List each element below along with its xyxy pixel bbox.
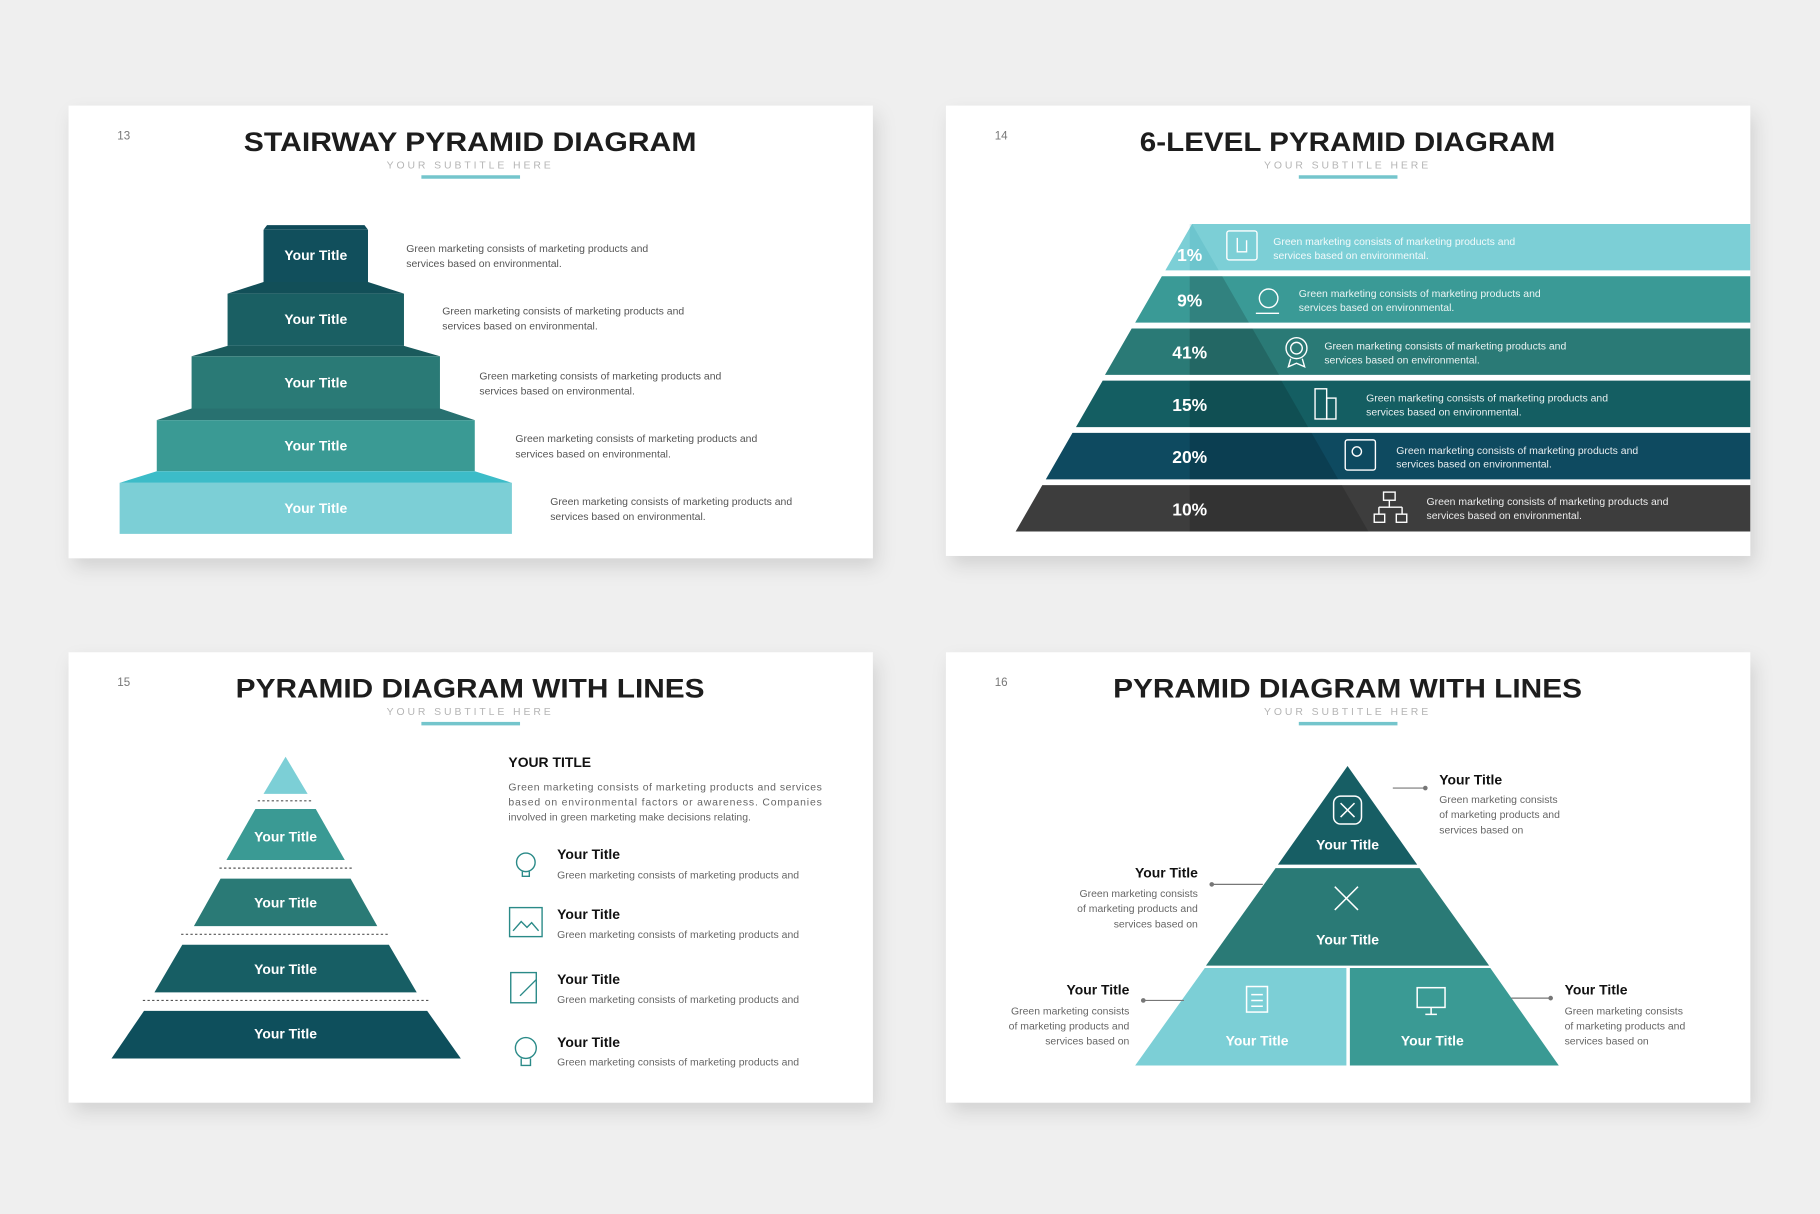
title: PYRAMID DIAGRAM WITH LINES bbox=[1113, 674, 1582, 704]
panel: pyramid diagram with lines (16): services based on bbox=[1045, 1037, 1130, 1048]
panel: pyramid diagram with lines (16): of marketing products and bbox=[1077, 904, 1198, 915]
stair pyramid chart: Your Title bbox=[284, 375, 347, 391]
panel: pyramid diagram with lines (15) bbox=[69, 652, 873, 1103]
step descriptions: services based on environmental. bbox=[550, 512, 706, 523]
step descriptions: Green marketing consists of marketing products and bbox=[406, 244, 648, 255]
level bars chart: 9% bbox=[1177, 290, 1202, 310]
triangle pyramid: Your Title bbox=[1316, 837, 1379, 853]
panel: pyramid diagram with lines (16): services based on bbox=[1114, 919, 1198, 930]
panel: stairway pyramid bbox=[69, 106, 873, 558]
panel: pyramid diagram with lines (16) bbox=[946, 652, 1750, 1103]
step descriptions bbox=[406, 244, 792, 523]
panel: pyramid diagram with lines (16): of marketing products and bbox=[1009, 1021, 1130, 1032]
level bars chart bbox=[1016, 224, 1750, 532]
slide number 16: 16 bbox=[995, 676, 1008, 689]
panel: pyramid diagram with lines (16): services based on bbox=[1565, 1037, 1649, 1048]
step descriptions: Green marketing consists of marketing products and bbox=[515, 434, 758, 445]
slide number 13: 13 bbox=[117, 129, 130, 142]
layered triangle pyramid: Your Title bbox=[254, 895, 317, 911]
panel: pyramid diagram with lines (15): based on environmental factors or awareness. Companies bbox=[508, 797, 822, 808]
level bars chart: services based on environmental. bbox=[1273, 251, 1429, 262]
panel: pyramid diagram with lines (15): involved in green marketing make decisions relating. bbox=[508, 813, 751, 824]
level bars chart: Green marketing consists of marketing products and bbox=[1366, 394, 1608, 405]
panel: 6-level pyramid bbox=[946, 106, 1750, 556]
panel: pyramid diagram with lines (15): Green marketing consists of marketing products and bbox=[557, 871, 799, 882]
level bars chart: 1% bbox=[1177, 245, 1202, 265]
slide number 14: 14 bbox=[995, 129, 1008, 142]
title: PYRAMID DIAGRAM WITH LINES bbox=[236, 674, 705, 704]
stair pyramid chart bbox=[120, 225, 512, 534]
triangle pyramid: Your Title bbox=[1316, 932, 1379, 948]
subtitle: YOUR SUBTITLE HERE bbox=[387, 707, 554, 718]
panel: pyramid diagram with lines (16): services based on bbox=[1439, 825, 1524, 836]
panel: pyramid diagram with lines (16): of marketing products and bbox=[1565, 1021, 1685, 1032]
panel: pyramid diagram with lines (15): Your Title bbox=[557, 846, 620, 862]
step descriptions: Green marketing consists of marketing products and bbox=[550, 497, 792, 508]
label bottom right: Your Title bbox=[1565, 982, 1628, 998]
level bars chart: 10% bbox=[1172, 499, 1207, 519]
label top right: Your Title bbox=[1439, 772, 1502, 788]
panel: pyramid diagram with lines (15): Green marketing consists of marketing products and services bbox=[508, 782, 822, 793]
panel: pyramid diagram with lines (15): Green marketing consists of marketing products and bbox=[557, 930, 799, 941]
level bars chart: services based on environmental. bbox=[1299, 303, 1454, 314]
stair pyramid chart: Your Title bbox=[284, 247, 347, 263]
layered triangle pyramid: Your Title bbox=[254, 1026, 317, 1042]
label bottom left: Your Title bbox=[1067, 982, 1130, 998]
level bars chart: services based on environmental. bbox=[1324, 355, 1480, 366]
panel: pyramid diagram with lines (16): Green marketing consists bbox=[1565, 1006, 1683, 1017]
level bars chart: services based on environmental. bbox=[1396, 460, 1552, 471]
layered triangle pyramid: Your Title bbox=[254, 828, 317, 844]
list items bbox=[510, 853, 542, 1065]
level bars chart: services based on environmental. bbox=[1426, 511, 1582, 522]
stair pyramid chart: Your Title bbox=[284, 311, 347, 327]
step descriptions: services based on environmental. bbox=[479, 387, 635, 398]
level bars chart: services based on environmental. bbox=[1366, 407, 1522, 418]
panel: pyramid diagram with lines (16): Green marketing consists bbox=[1079, 889, 1198, 900]
level bars chart: Green marketing consists of marketing products and bbox=[1426, 497, 1669, 508]
stair pyramid chart: Your Title bbox=[284, 437, 347, 453]
triangle pyramid: Your Title bbox=[1226, 1033, 1289, 1049]
level bars chart: 15% bbox=[1172, 395, 1207, 415]
panel: pyramid diagram with lines (15): Your Title bbox=[557, 1034, 620, 1050]
step descriptions: services based on environmental. bbox=[442, 322, 598, 333]
triangle pyramid bbox=[1135, 766, 1559, 1065]
text block: your title: YOUR TITLE bbox=[508, 754, 591, 770]
connector lines bbox=[1142, 786, 1552, 1002]
subtitle: YOUR SUBTITLE HERE bbox=[1264, 160, 1431, 171]
level bars chart: 20% bbox=[1172, 447, 1207, 467]
layered triangle pyramid bbox=[111, 757, 461, 1058]
stair pyramid chart: Your Title bbox=[284, 500, 347, 516]
subtitle: YOUR SUBTITLE HERE bbox=[387, 160, 554, 171]
panel: pyramid diagram with lines (16): Green marketing consists bbox=[1439, 795, 1558, 806]
title: 6-level pyramid diagram: 6-LEVEL PYRAMID DIAGRAM bbox=[1140, 127, 1555, 157]
step descriptions: services based on environmental. bbox=[515, 449, 671, 460]
slide number 15: 15 bbox=[117, 676, 130, 689]
icons bbox=[1227, 231, 1407, 522]
level bars chart: Green marketing consists of marketing products and bbox=[1396, 446, 1638, 457]
layered triangle pyramid: Your Title bbox=[254, 961, 317, 977]
level bars chart: Green marketing consists of marketing products and bbox=[1324, 341, 1566, 352]
step descriptions: services based on environmental. bbox=[406, 259, 562, 270]
label middle left: Your Title bbox=[1135, 864, 1198, 880]
title: stairway pyramid diagram: STAIRWAY PYRAMID DIAGRAM bbox=[244, 127, 696, 157]
panel: pyramid diagram with lines (15): Green marketing consists of marketing products and bbox=[557, 1057, 799, 1068]
step descriptions: Green marketing consists of marketing products and bbox=[479, 372, 722, 383]
panel: pyramid diagram with lines (15): Green marketing consists of marketing products and bbox=[557, 995, 799, 1006]
panel: pyramid diagram with lines (15): Your Title bbox=[557, 971, 620, 987]
triangle pyramid: Your Title bbox=[1401, 1033, 1464, 1049]
level bars chart: 41% bbox=[1172, 343, 1207, 363]
panel: pyramid diagram with lines (16): Green marketing consists bbox=[1011, 1006, 1129, 1017]
panel: pyramid diagram with lines (16): of marketing products and bbox=[1439, 810, 1560, 821]
level bars chart: Green marketing consists of marketing products and bbox=[1299, 289, 1541, 300]
step descriptions: Green marketing consists of marketing products and bbox=[442, 307, 684, 318]
level bars chart: Green marketing consists of marketing products and bbox=[1273, 237, 1515, 248]
subtitle: YOUR SUBTITLE HERE bbox=[1264, 707, 1431, 718]
panel: pyramid diagram with lines (15): Your Title bbox=[557, 906, 620, 922]
